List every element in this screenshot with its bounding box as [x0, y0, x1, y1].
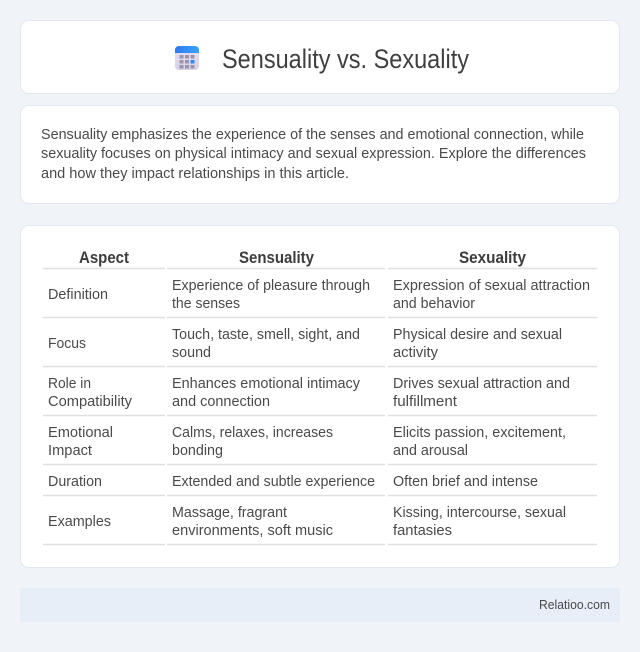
footer credit: Relatioo.com	[539, 598, 610, 612]
row: role in compatibility: Role in	[48, 376, 91, 392]
row: examples: environments, soft music	[172, 523, 334, 539]
row: emotional impact: and arousal	[393, 443, 468, 459]
row: role in compatibility: and connection	[172, 394, 270, 410]
row: examples	[48, 505, 566, 539]
row: role in compatibility: Compatibility	[48, 394, 133, 410]
row: role in compatibility: Drives sexual attraction and	[393, 376, 570, 392]
row: duration: Duration	[48, 474, 102, 490]
footer	[20, 588, 620, 622]
panel: title header	[20, 20, 620, 94]
row: focus: activity	[393, 345, 439, 361]
table header: Sensuality	[239, 249, 315, 267]
table header	[79, 249, 527, 267]
row: focus: sound	[172, 345, 211, 361]
row: duration: Often brief and intense	[393, 474, 538, 490]
row: duration	[48, 474, 538, 490]
panel: introduction	[20, 106, 620, 204]
icon: calendar	[175, 46, 199, 70]
row: emotional impact	[48, 425, 566, 459]
row: examples: Kissing, intercourse, sexual	[393, 505, 566, 521]
row: focus: Focus	[48, 336, 86, 352]
row: focus	[48, 327, 562, 361]
row: emotional impact: Impact	[48, 443, 92, 459]
row: focus: Touch, taste, smell, sight, and	[172, 327, 360, 343]
row: role in compatibility: Enhances emotional intimacy	[172, 376, 361, 392]
table header: Aspect	[79, 249, 129, 267]
row: focus: Physical desire and sexual	[393, 327, 562, 343]
title: Sensuality vs. Sexuality	[222, 44, 470, 74]
table header: Sexuality	[459, 249, 527, 267]
row: emotional impact: Elicits passion, excitement,	[393, 425, 566, 441]
intro text: sexuality focuses on physical intimacy and sexual expression. Explore the differences	[41, 145, 586, 162]
row: emotional impact: Calms, relaxes, increases	[172, 425, 333, 441]
row: definition: and behavior	[393, 296, 475, 312]
row: role in compatibility	[48, 376, 570, 410]
row: definition: Expression of sexual attraction	[393, 278, 590, 294]
row: emotional impact: Emotional	[48, 425, 113, 441]
row: examples: Examples	[48, 514, 111, 530]
intro text: Sensuality emphasizes the experience of the senses and emotional connection, while	[41, 126, 584, 143]
intro text: and how they impact relationships in this article.	[41, 165, 349, 182]
row: definition: the senses	[172, 296, 240, 312]
row: definition: Experience of pleasure through	[172, 278, 370, 294]
panel: comparison table	[20, 226, 620, 568]
intro text	[41, 126, 586, 182]
row: emotional impact: bonding	[172, 443, 223, 459]
row: duration: Extended and subtle experience	[172, 474, 375, 490]
row: definition: Definition	[48, 287, 108, 303]
row: definition	[48, 278, 590, 312]
row: examples: fantasies	[393, 523, 452, 539]
row: role in compatibility: fulfillment	[393, 394, 457, 410]
row: examples: Massage, fragrant	[172, 505, 287, 521]
